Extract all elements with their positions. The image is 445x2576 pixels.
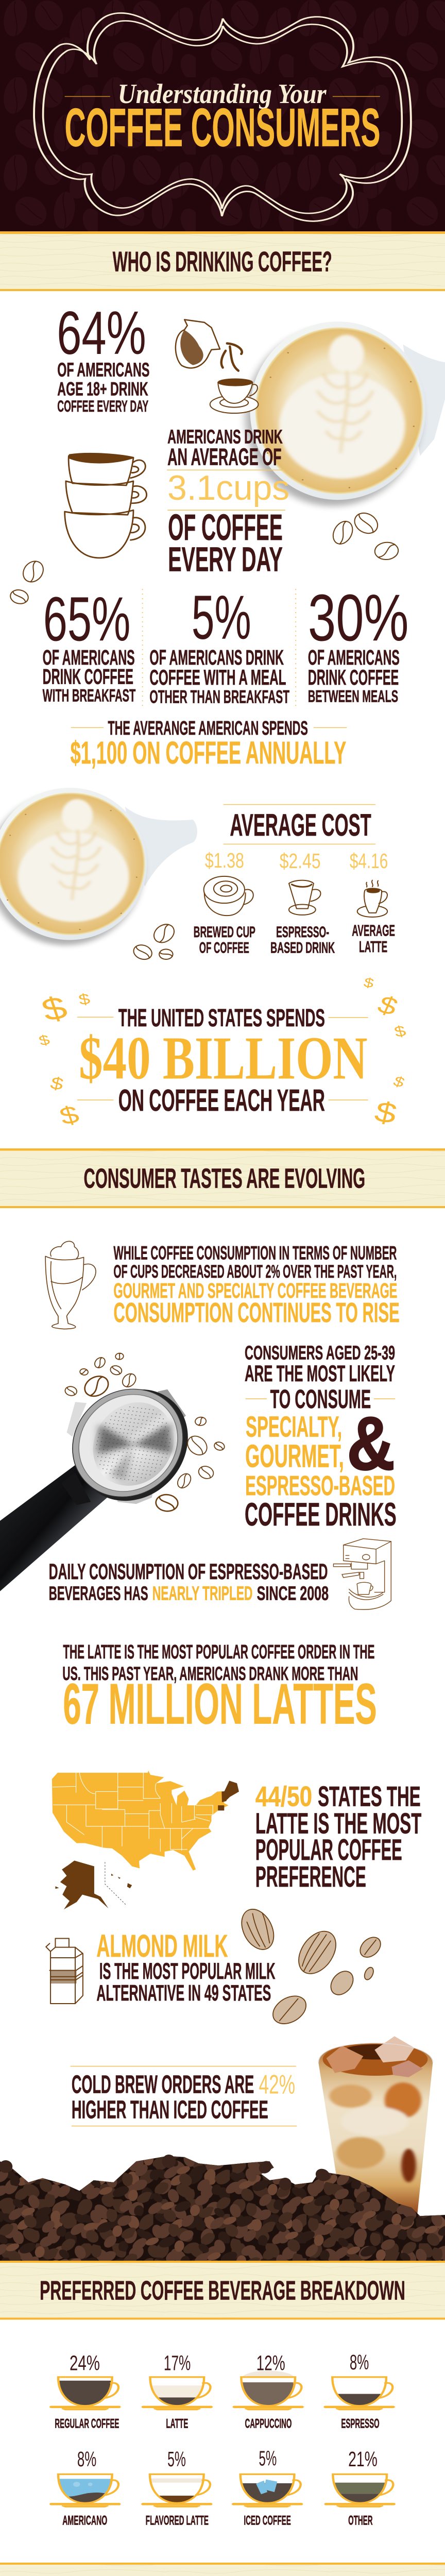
icon: espresso machine xyxy=(333,1539,391,1609)
cup: americano 8 percent: AMERICANO xyxy=(62,2514,107,2528)
panel: average cost: ESPRESSO- xyxy=(276,924,329,941)
icon: stack of three cups xyxy=(65,453,147,558)
stat: 3.1 cups per day: 3.1cups xyxy=(167,468,289,507)
cup: espresso 8 percent: ESPRESSO xyxy=(341,2417,380,2431)
text: consumers aged 25-39 xyxy=(245,1342,397,1532)
icon: small cup on saucer xyxy=(210,379,258,413)
photo: second latte art cup xyxy=(0,788,197,945)
cup: latte 17 percent: 17% xyxy=(164,2351,191,2375)
panel: consumer tastes are evolving xyxy=(0,1241,421,2028)
panel: average cost: OF COFFEE xyxy=(199,939,249,956)
text: almond milk: ALMOND MILK xyxy=(96,1928,228,1963)
cup: espresso 8 percent: 8% xyxy=(350,2351,369,2374)
panel: who is drinking coffee stats: AGE 18+ DRINK xyxy=(57,379,148,400)
cup: americano 8 percent xyxy=(51,2448,119,2528)
label: 65 percent with breakfast xyxy=(43,647,136,705)
title script line: Understanding Your xyxy=(118,78,327,109)
icon: scattered dollar signs: $ xyxy=(37,1031,52,1048)
panel: average cost: BREWED CUP xyxy=(194,924,255,941)
section band: consumer tastes are evolving xyxy=(0,1148,445,1208)
panel: cold brew: 42% xyxy=(259,2070,295,2099)
text: 44 of 50 states: 44/50 xyxy=(255,1781,312,1812)
panel: beverage breakdown cups: ICED COFFEE xyxy=(244,2514,291,2528)
panel: beverage breakdown cups: CAPPUCCINO xyxy=(245,2417,292,2431)
icon: scattered dollar signs: $ xyxy=(392,1023,408,1041)
cup: cappuccino 12 percent: 12% xyxy=(256,2351,285,2375)
text: consumption trend xyxy=(113,1243,400,1328)
panel: who is drinking coffee stats: 5% xyxy=(192,583,251,652)
text: espresso tripled: BEVERAGES HAS xyxy=(49,1582,148,1604)
icon: scattered dollar signs: $ xyxy=(391,1073,407,1090)
cup: americano 8 percent: 8% xyxy=(77,2448,96,2471)
cup: regular coffee 24 percent xyxy=(51,2351,119,2431)
icon: milk carton xyxy=(46,1938,83,2004)
icon: beans around portafilter xyxy=(63,1352,227,1514)
icon: scattered dollar signs: $ xyxy=(373,991,402,1021)
icon: scattered dollar signs: $ xyxy=(56,1100,82,1130)
panel: who is drinking coffee stats: DRINK COFFEE xyxy=(43,665,133,689)
photo: latte art cup xyxy=(245,321,445,506)
icon: scattered dollar signs: $ xyxy=(362,975,375,991)
panel: header xyxy=(0,0,445,232)
cup: espresso 8 percent xyxy=(325,2351,393,2431)
icon: scattered dollar signs: $ xyxy=(48,1074,65,1094)
cup: iced coffee 5 percent: 5% xyxy=(259,2447,277,2470)
panel: who is drinking coffee stats: OF AMERICANS xyxy=(57,359,149,381)
icon: coffee beans xyxy=(7,510,403,606)
panel: beverage breakdown cups: FLAVORED LATTE xyxy=(146,2514,209,2528)
cup: other 21 percent: OTHER xyxy=(348,2514,373,2528)
panel: who is drinking coffee stats: EVERY DAY xyxy=(168,540,283,579)
text: consumers aged 25-39: & xyxy=(347,1401,395,1485)
ornate title frame xyxy=(34,13,411,221)
icon: scattered dollar signs: $ xyxy=(37,990,72,1028)
icon: pouring coffee pot xyxy=(176,319,242,371)
stat: 64 percent: 64% xyxy=(57,299,146,367)
text: 44 of 50 states xyxy=(255,1781,421,1893)
icon: latte with steam xyxy=(357,880,387,917)
panel: who is drinking coffee stats: WITH BREAKFAST xyxy=(43,686,136,705)
cup: cappuccino 12 percent xyxy=(234,2351,302,2431)
cup: flavored latte 5 percent: 5% xyxy=(167,2448,186,2471)
icon: espresso glass xyxy=(289,880,321,915)
text: espresso tripled: NEARLY TRIPLED xyxy=(152,1582,252,1604)
panel: who is drinking coffee stats: COFFEE EVERY DAY xyxy=(57,397,148,415)
panel: who is drinking coffee stats xyxy=(0,299,445,962)
section band: preferred coffee beverage breakdown xyxy=(0,2261,445,2319)
cup: regular coffee 24 percent: 24% xyxy=(70,2351,100,2375)
icon: brewed cup xyxy=(204,876,253,916)
cup: latte 17 percent xyxy=(143,2351,211,2431)
panel: who is drinking coffee stats: AMERICANS DRINK xyxy=(167,427,283,448)
panel: average cost: $4.16 xyxy=(350,850,388,873)
panel: united states spends 40 billion xyxy=(37,975,408,1130)
icon: scattered dollar signs: $ xyxy=(77,991,92,1008)
photo: iced coffee glass xyxy=(318,2036,433,2216)
section band: who is drinking coffee xyxy=(0,231,445,291)
section band: female coffee drinkers xyxy=(0,2563,445,2576)
cup: other 21 percent: 21% xyxy=(348,2448,378,2471)
cup: iced coffee 5 percent xyxy=(233,2447,301,2528)
panel: beverage breakdown cups: REGULAR COFFEE xyxy=(55,2417,119,2431)
panel: who is drinking coffee stats: OF AMERICANS xyxy=(43,647,135,669)
cup: flavored latte 5 percent xyxy=(143,2448,211,2528)
panel: who is drinking coffee stats: OF COFFEE xyxy=(168,507,283,548)
callout: annual spend 1100 dollars xyxy=(71,717,347,771)
cup: other 21 percent xyxy=(326,2448,394,2528)
text: espresso tripled xyxy=(49,1559,329,1604)
label: 5 percent with a meal xyxy=(149,647,289,707)
icon: almonds xyxy=(236,1907,385,2028)
panel: who is drinking coffee stats: AN AVERAGE OF xyxy=(167,443,282,470)
icon: scattered dollar signs xyxy=(37,975,408,1130)
panel: cold brew xyxy=(0,2036,445,2261)
panel: average cost: $1.38 xyxy=(205,849,244,872)
panel: consumer tastes are evolving: SINCE 2008 xyxy=(257,1582,329,1604)
stat: 3.1 cups per day xyxy=(167,427,289,579)
icon: whipped coffee glass xyxy=(45,1241,96,1329)
panel: beverage breakdown cups xyxy=(51,2351,394,2528)
panel: average cost: LATTE xyxy=(359,938,387,956)
icon: three beans xyxy=(130,922,178,962)
panel: average cost xyxy=(194,805,395,956)
text: latte most popular xyxy=(62,1641,377,1736)
panel: average cost: BASED DRINK xyxy=(270,939,335,956)
panel: average cost: $2.45 xyxy=(280,850,321,873)
icon: scattered dollar signs: $ xyxy=(371,1096,400,1129)
photo: heap of coffee beans xyxy=(0,2155,445,2261)
label: 30 percent between meals xyxy=(308,647,400,706)
cup: latte 17 percent: LATTE xyxy=(166,2417,188,2431)
stat: 64 percent xyxy=(57,299,149,415)
photo: portafilter xyxy=(0,1382,201,1591)
map: latte preference by US state xyxy=(52,1771,239,1909)
stat: 65 percent: 65% xyxy=(43,584,130,654)
text: almond milk xyxy=(96,1928,276,2005)
